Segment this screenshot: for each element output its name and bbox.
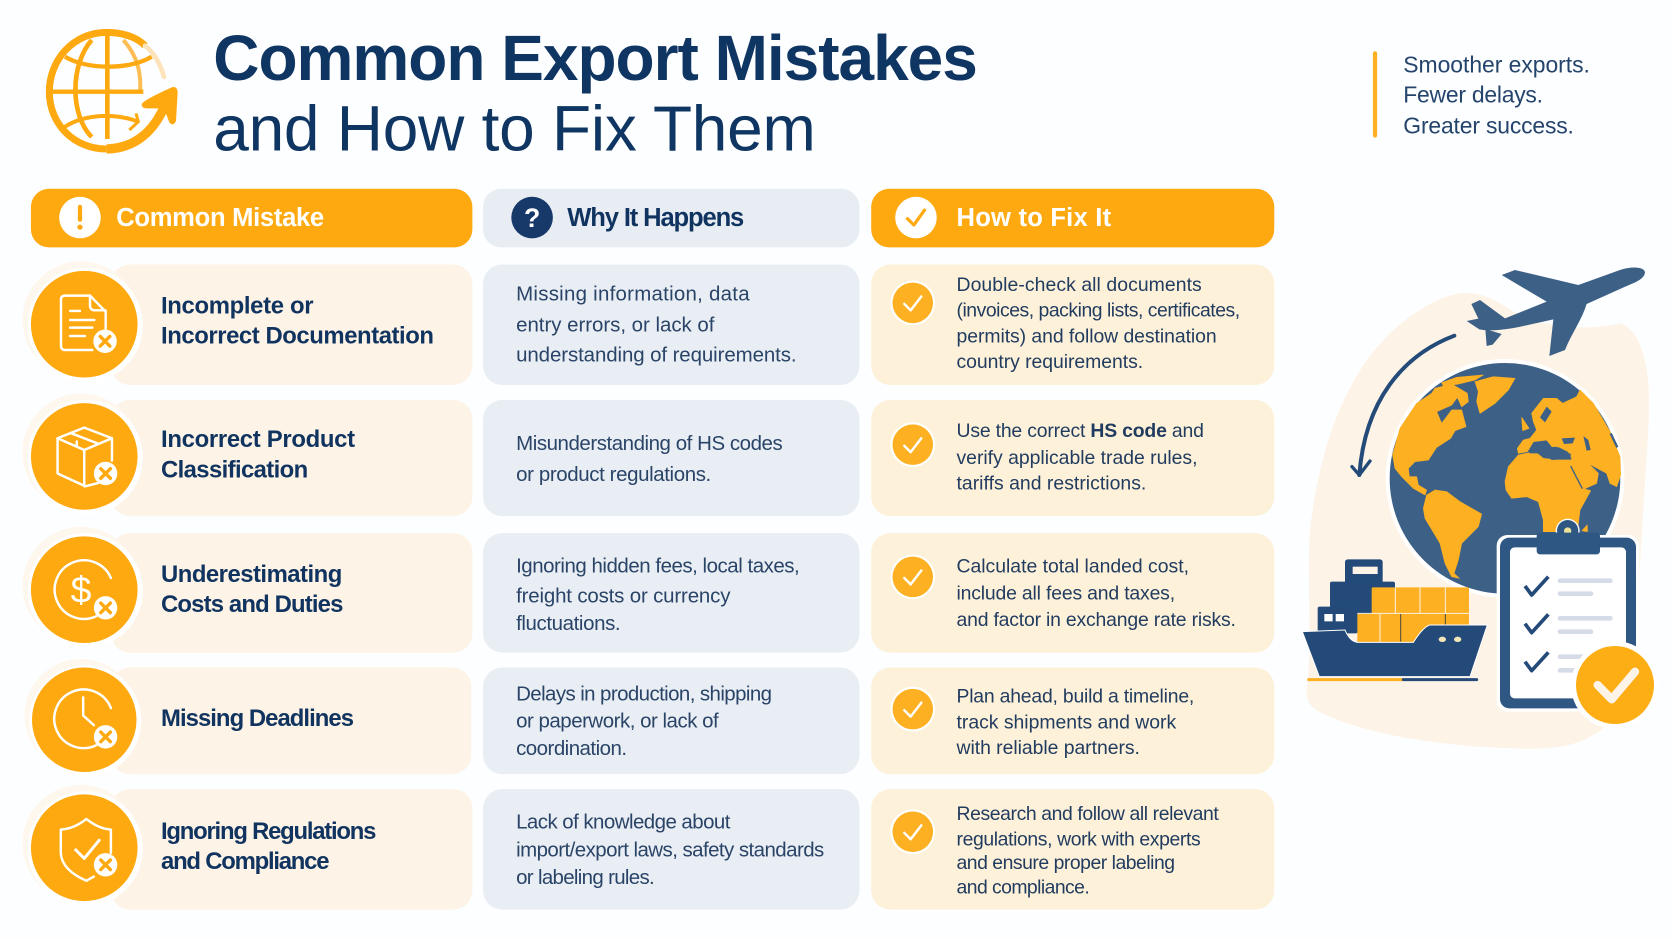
icon: clock	[54, 689, 111, 748]
title	[213, 22, 978, 164]
panel: fix 1: Double-check all documents	[956, 274, 1202, 296]
panel: mistake 2	[22, 393, 472, 516]
panel: fix 4	[871, 668, 1274, 774]
panel: why 3: freight costs or currency	[516, 584, 731, 607]
panel: fix 1	[871, 264, 1274, 385]
header: why it happens: Why It Happens	[567, 204, 744, 232]
panel: why 1: entry errors, or lack of	[516, 314, 715, 337]
header: how to fix it: How to Fix It	[956, 204, 1112, 232]
panel: why 3: Ignoring hidden fees, local taxes,	[516, 555, 800, 578]
panel: fix 3: include all fees and taxes,	[956, 582, 1175, 604]
panel: why 1: Missing information, data	[516, 283, 750, 306]
label: costs and duties	[161, 561, 343, 618]
panel: mistake 4	[25, 659, 471, 777]
label: product classification: Classification	[161, 457, 308, 484]
panel: fix 5: regulations, work with experts	[956, 829, 1201, 851]
panel: fix 4: track shipments and work	[956, 711, 1176, 733]
panel: why 2	[483, 400, 859, 516]
panel: why 4: coordination.	[516, 737, 627, 760]
icon: clipboard checklist	[1497, 519, 1639, 712]
label: product classification	[161, 426, 355, 484]
panel: fix 3: and factor in exchange rate risks.	[956, 609, 1236, 631]
icon: x badge	[94, 462, 117, 485]
panel: fix 2	[871, 400, 1274, 516]
icon: shield	[61, 819, 111, 881]
icon: airplane	[1467, 267, 1645, 356]
icon: box	[58, 428, 112, 486]
background blob	[1306, 293, 1649, 749]
label: regulations and compliance: Ignoring Regulations	[161, 818, 376, 845]
arrow: route curve	[1352, 336, 1454, 475]
icon: globe with arrow	[49, 32, 178, 149]
panel: why 3: fluctuations.	[516, 612, 621, 635]
panel: fix 5: and ensure proper labeling	[956, 852, 1175, 874]
continents	[1393, 375, 1621, 578]
icon: document	[61, 296, 106, 350]
label: costs and duties: Underestimating	[161, 561, 342, 588]
icon: cargo ship	[1302, 559, 1487, 680]
panel: why 5	[483, 789, 859, 910]
header: how to fix it	[871, 189, 1274, 247]
panel: fix 5	[871, 789, 1274, 910]
label: regulations and compliance	[161, 818, 376, 875]
icon: x badge	[94, 596, 117, 620]
tagline: Fewer delays.	[1403, 81, 1543, 107]
illustration: global export scene	[1302, 267, 1659, 749]
panel: fix 1: permits) and follow destination	[956, 325, 1217, 347]
panel: why 4: Delays in production, shipping	[516, 683, 772, 706]
label: costs and duties: Costs and Duties	[161, 591, 343, 618]
panel: fix 2: Use the correct HS code and	[956, 420, 1204, 442]
panel: fix 3	[871, 533, 1274, 653]
seas and inland water	[1528, 407, 1617, 489]
panel: why 2: or product regulations.	[516, 463, 711, 486]
panel: fix 5: and compliance.	[956, 877, 1090, 899]
tagline: Greater success.	[1403, 112, 1574, 138]
panel: mistake 3	[22, 527, 472, 653]
panel: fix 4: with reliable partners.	[955, 737, 1140, 759]
panel: fix 2: verify applicable trade rules,	[956, 447, 1197, 469]
header: common mistake: Common Mistake	[116, 204, 324, 232]
tagline: Smoother exports.	[1403, 52, 1590, 78]
header: common mistake	[31, 189, 472, 247]
header: why it happens: ?	[524, 203, 540, 233]
header: why it happens	[483, 189, 859, 247]
icon: x badge	[94, 853, 117, 877]
label: incomplete documentation: Incomplete or	[161, 293, 314, 320]
panel: why 4: or paperwork, or lack of	[516, 709, 719, 732]
label: missing deadlines: Missing Deadlines	[161, 705, 354, 732]
label: regulations and compliance: and Compliance	[161, 848, 329, 875]
panel: why 5: import/export laws, safety standards	[516, 838, 824, 861]
panel: why 1: understanding of requirements.	[516, 344, 797, 367]
icon: approved badge	[1571, 641, 1659, 729]
title: Common Export Mistakes	[213, 22, 978, 94]
panel: why 4	[483, 668, 859, 774]
icon: dollar circle	[55, 560, 111, 619]
panel: why 3	[483, 533, 859, 653]
panel: mistake 1	[22, 261, 472, 385]
label: incomplete documentation	[161, 293, 434, 349]
panel: why 2: Misunderstanding of HS codes	[516, 432, 783, 455]
icon: x badge	[93, 330, 117, 353]
panel: fix 4: Plan ahead, build a timeline,	[956, 686, 1194, 708]
panel: mistake 5	[22, 785, 472, 910]
panel: fix 1: country requirements.	[956, 351, 1143, 373]
panel: fix 1: (invoices, packing lists, certificates,	[956, 300, 1240, 322]
icon: x badge	[94, 725, 117, 749]
panel: fix 5: Research and follow all relevant	[956, 803, 1219, 825]
panel: why 5: or labeling rules.	[516, 866, 655, 889]
panel: fix 2: tariffs and restrictions.	[956, 472, 1146, 494]
globe	[1386, 359, 1624, 598]
panel: why 5: Lack of knowledge about	[516, 811, 731, 834]
panel: fix 3: Calculate total landed cost,	[956, 556, 1189, 578]
label: product classification: Incorrect Product	[161, 426, 355, 453]
icon: dollar circle: $	[71, 568, 92, 610]
title: and How to Fix Them	[213, 92, 816, 164]
tagline	[1373, 51, 1590, 138]
panel: why 1	[483, 264, 859, 385]
label: incomplete documentation: Incorrect Documentation	[161, 322, 434, 349]
